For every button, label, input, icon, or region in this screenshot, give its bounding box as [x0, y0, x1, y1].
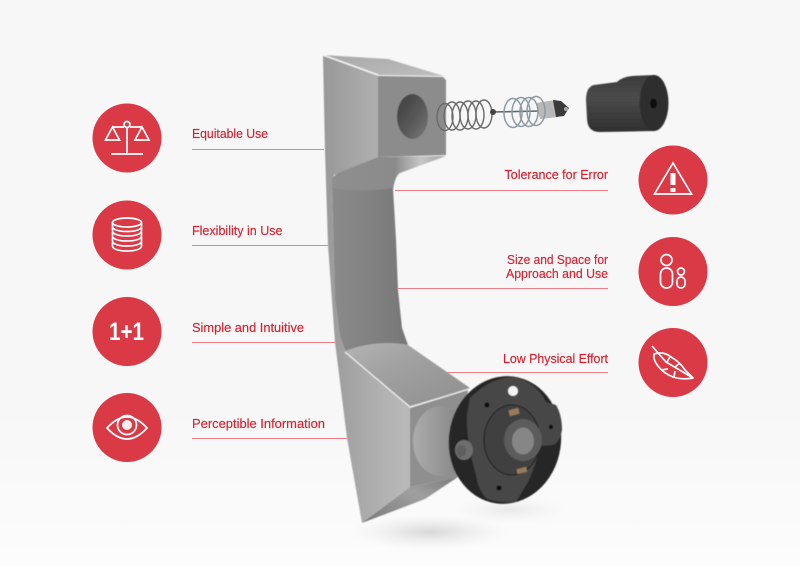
spring 1 [437, 100, 492, 130]
disc fixing holes [484, 386, 553, 490]
circle: Tolerance for Error icon [638, 146, 708, 214]
handle: lower end face [410, 390, 468, 487]
label: Simple and Intuitive: Simple and Intuitive [192, 320, 304, 335]
label: Flexibility in Use: Flexibility in Use [192, 223, 282, 238]
spring 2 [504, 96, 545, 128]
handle: lower bevel [345, 343, 470, 407]
spring and pin [437, 96, 569, 130]
label: Size and Space for Approach and Use: Approach and Use [506, 266, 608, 281]
rubber plug [586, 75, 668, 132]
leader lines [192, 150, 608, 438]
pin [492, 111, 540, 112]
label: Size and Space for Approach and Use [506, 252, 609, 281]
handle: block socket hole [397, 94, 428, 139]
disc lobed plate [467, 377, 562, 502]
label: Low Physical Effort: Low Physical Effort [503, 351, 608, 366]
circle: Low Physical Effort icon [638, 328, 708, 397]
label: Size and Space for Approach and Use: Size and Space for [507, 252, 609, 267]
handle: top face [323, 55, 444, 76]
handle: under bevel [332, 156, 446, 191]
door handle [323, 55, 470, 523]
circle: Equitable Use icon [92, 104, 162, 172]
disc back plate [441, 369, 569, 511]
handle: outer front face [323, 55, 410, 523]
label: Equitable Use: Equitable Use [192, 126, 268, 141]
disc hub [484, 405, 540, 475]
handle: lower bottom bevel [362, 477, 458, 523]
circle: Simple and Intuitive icon [92, 297, 162, 366]
handle: block end face [378, 76, 446, 157]
label: Perceptible Information: Perceptible Information [192, 416, 325, 431]
circle: Simple and Intuitive icon: 1+1 [109, 318, 144, 346]
mounting disc [441, 369, 569, 511]
floor shadow [350, 496, 570, 550]
handle: inner grip face [332, 188, 408, 352]
label: Tolerance for Error: Tolerance for Error [504, 167, 609, 182]
circle: Size and Space icon [638, 237, 708, 306]
disc bolt [455, 440, 473, 460]
circle: Perceptible Information icon [92, 393, 162, 462]
circle: Flexibility in Use icon [92, 200, 162, 270]
